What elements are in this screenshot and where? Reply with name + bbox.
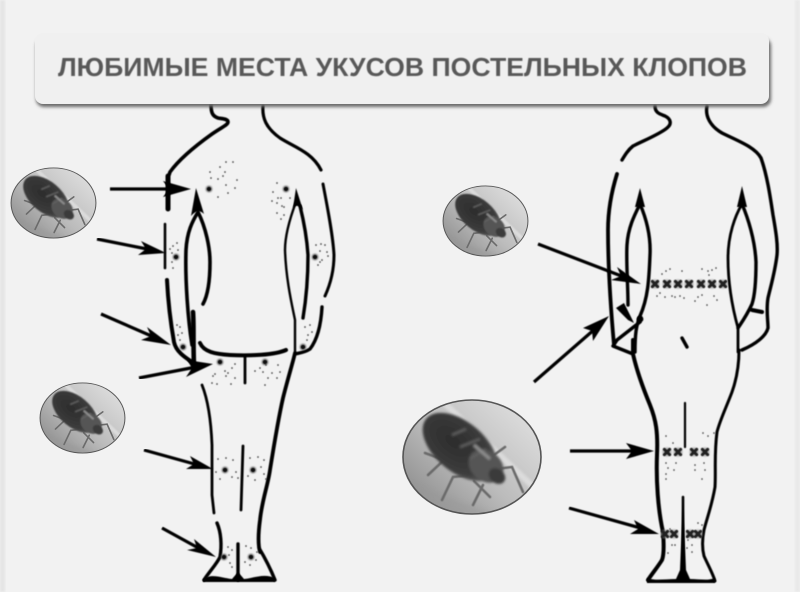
arrow: to right hand [534,316,609,382]
icon: bed bug, lower left [39,382,126,455]
arrow: to left ankle [162,528,216,557]
arrow: to left knee [144,450,213,469]
left figure: bite marks [170,162,328,567]
title text: ЛЮБИМЫЕ МЕСТА УКУСОВ ПОСТЕЛЬНЫХ КЛОПОВ [58,52,747,82]
arrow: to left elbow [97,239,166,255]
right figure: feet [616,186,747,583]
arrow: to right ankle [569,508,659,534]
title banner [35,33,771,107]
arrow: to right waist [538,244,641,284]
icon: bed bug, large [402,399,542,517]
arrow: to right knee [570,443,654,459]
arrow: to left buttock [139,360,213,378]
left figure: feet [191,188,303,582]
icon: bed bug, upper centre [442,185,529,258]
right figure: bite marks [650,268,728,553]
arrow: to left shoulder [110,181,191,197]
right figure: outline of body, front view [608,106,777,581]
icon: bed bug, upper left [10,167,97,240]
left figure: outline of body, back view [165,104,334,580]
arrow: to left wrist [101,314,171,345]
